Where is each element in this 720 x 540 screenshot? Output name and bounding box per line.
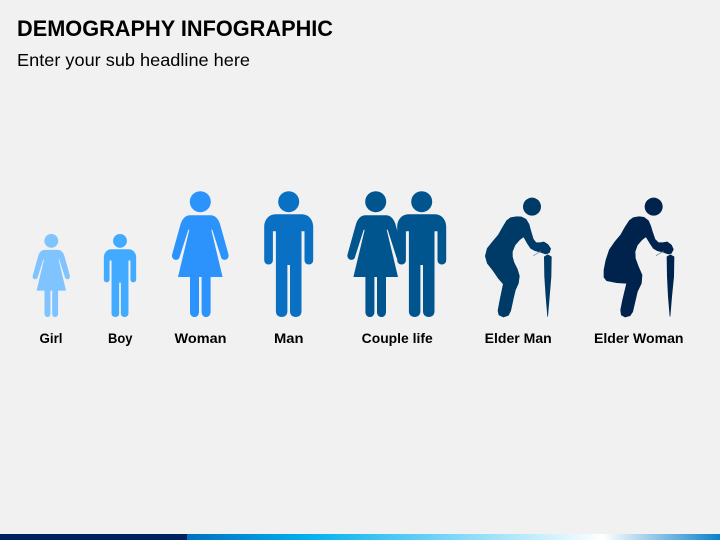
title: DEMOGRAPHY INFOGRAPHIC: [17, 16, 333, 41]
label: man: Man: [274, 331, 304, 346]
footer bar: [0, 534, 720, 540]
label: elder man: Elder Man: [485, 331, 552, 346]
icon: elder man: [485, 198, 552, 317]
label: boy: Boy: [108, 331, 133, 346]
label: couple life: Couple life: [362, 331, 433, 346]
icon: man: [264, 191, 313, 317]
label: woman: Woman: [174, 331, 226, 346]
subtitle: Enter your sub headline here: [17, 50, 250, 70]
label: girl: Girl: [40, 331, 62, 346]
icon: woman: [172, 191, 229, 317]
label: elder woman: Elder Woman: [594, 331, 684, 346]
icon: couple: [347, 191, 446, 317]
icon: elder woman: [604, 198, 674, 317]
icon: girl: [33, 234, 70, 317]
icon: boy: [104, 234, 136, 317]
